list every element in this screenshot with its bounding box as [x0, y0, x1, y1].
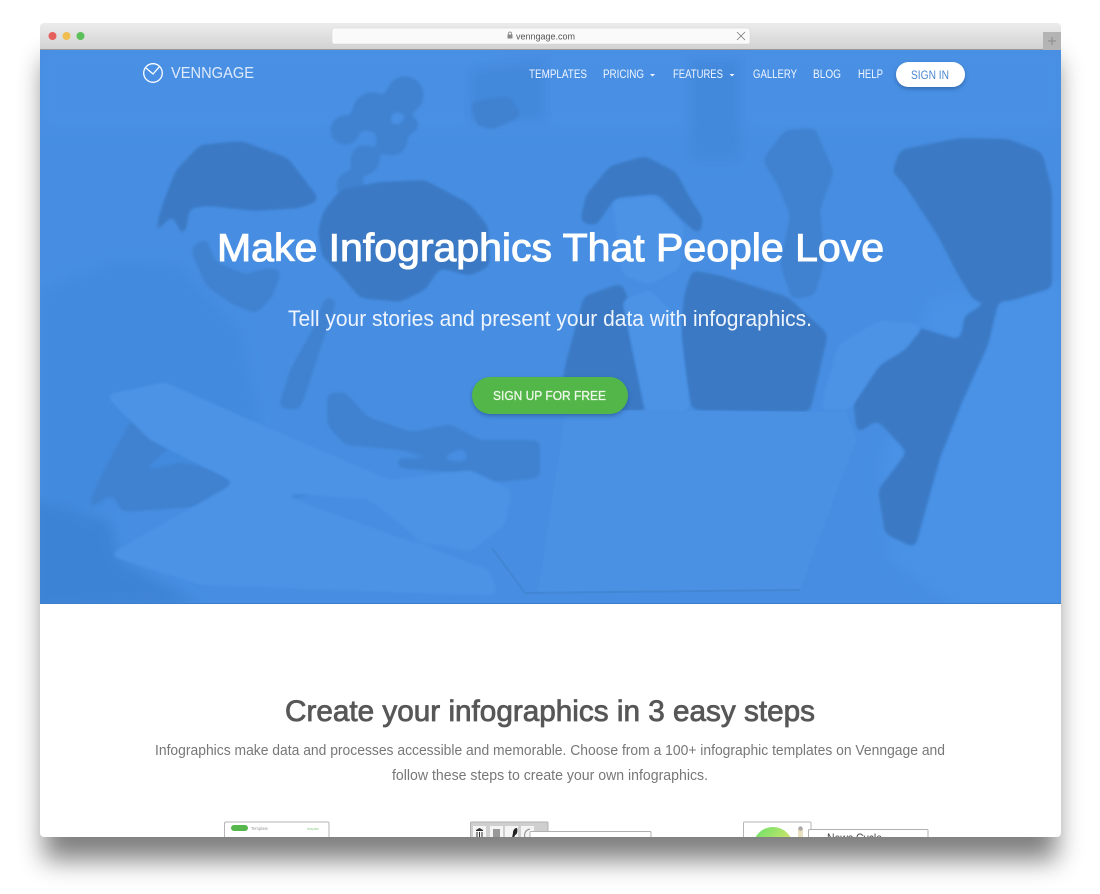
window control: zoom [76, 32, 84, 40]
man with hat: face [515, 828, 790, 837]
card title: News Cycle [827, 831, 882, 845]
woman right hair [892, 138, 1052, 301]
man left beard [192, 241, 280, 312]
sign in button: SIGN IN [911, 70, 949, 82]
logo wordmark: VENNGAGE [171, 65, 254, 82]
woman right long hair [848, 296, 1000, 548]
photo: light foreground [112, 298, 921, 559]
man with hat: hat [580, 156, 703, 236]
photo: laptop edge [492, 548, 800, 593]
woman arm [327, 392, 480, 458]
template label: Template [251, 826, 268, 831]
table items [460, 440, 540, 482]
photo: soft tone areas [40, 504, 180, 603]
section heading: Create your infographics in 3 easy steps [285, 695, 815, 728]
overlapping card [808, 830, 928, 850]
icon: feather [512, 828, 517, 838]
section description [155, 742, 945, 784]
nav: pricing: PRICING [603, 69, 644, 81]
hero photo background [30, 50, 1065, 610]
photo: laptop [620, 410, 806, 413]
icon: spiral [525, 829, 530, 838]
browser toolbar [40, 23, 1061, 50]
man with hat: shirt [622, 290, 690, 412]
photo: mid-tone details [86, 76, 834, 512]
address bar [332, 28, 750, 44]
photo: dark figures [152, 138, 1052, 548]
step 3 thumbnail [744, 822, 928, 867]
nav: features: FEATURES [673, 69, 723, 81]
sign up button [472, 377, 628, 414]
gradient chart [753, 827, 793, 867]
new tab button [1043, 32, 1061, 50]
hanging plant [472, 98, 518, 129]
hero title: Make Infographics That People Love [217, 227, 884, 270]
left plant [330, 115, 360, 145]
man with hat: jacket left [556, 283, 648, 412]
table paper [108, 480, 498, 596]
navigation bar [144, 62, 965, 87]
woman hair [318, 180, 490, 302]
window control: minimize [62, 32, 70, 40]
overlapping card [530, 832, 651, 852]
hero subtitle: Tell your stories and present your data with infographics. [288, 306, 812, 331]
color slider [798, 828, 803, 842]
icon tiles [473, 826, 534, 846]
window control: close [48, 32, 56, 40]
icon: building [476, 828, 483, 838]
section description: Infographics make data and processes accessible and memorable. Choose from a 100+ infographic templates on Venngage and [155, 742, 945, 759]
step 1 thumbnail [224, 822, 329, 852]
icon: venngage clock [144, 64, 162, 82]
man with hat: jacket right [680, 270, 828, 412]
man left arm [112, 384, 492, 498]
nav: templates: TEMPLATES [529, 69, 587, 81]
section description: follow these steps to create your own infographics. [392, 767, 708, 784]
sign in button [896, 62, 965, 87]
nav links [529, 69, 883, 81]
sign up button: SIGN UP FOR FREE [493, 388, 606, 403]
icon: close tab [737, 32, 745, 40]
logo [144, 64, 254, 82]
hand shadow [86, 418, 172, 512]
url text: venngage.com [516, 32, 575, 42]
right plant [762, 128, 834, 300]
man left hair [152, 141, 320, 240]
step 2 thumbnail [470, 822, 651, 852]
icon: shop [493, 829, 500, 838]
green link: template [307, 826, 320, 831]
green pill [231, 825, 248, 831]
nav: blog: BLOG [813, 69, 841, 81]
nav: gallery: GALLERY [753, 69, 797, 81]
nav: help: HELP [858, 69, 883, 81]
icon: lock [508, 32, 512, 38]
woman right hand [820, 320, 925, 410]
braid [278, 296, 337, 410]
